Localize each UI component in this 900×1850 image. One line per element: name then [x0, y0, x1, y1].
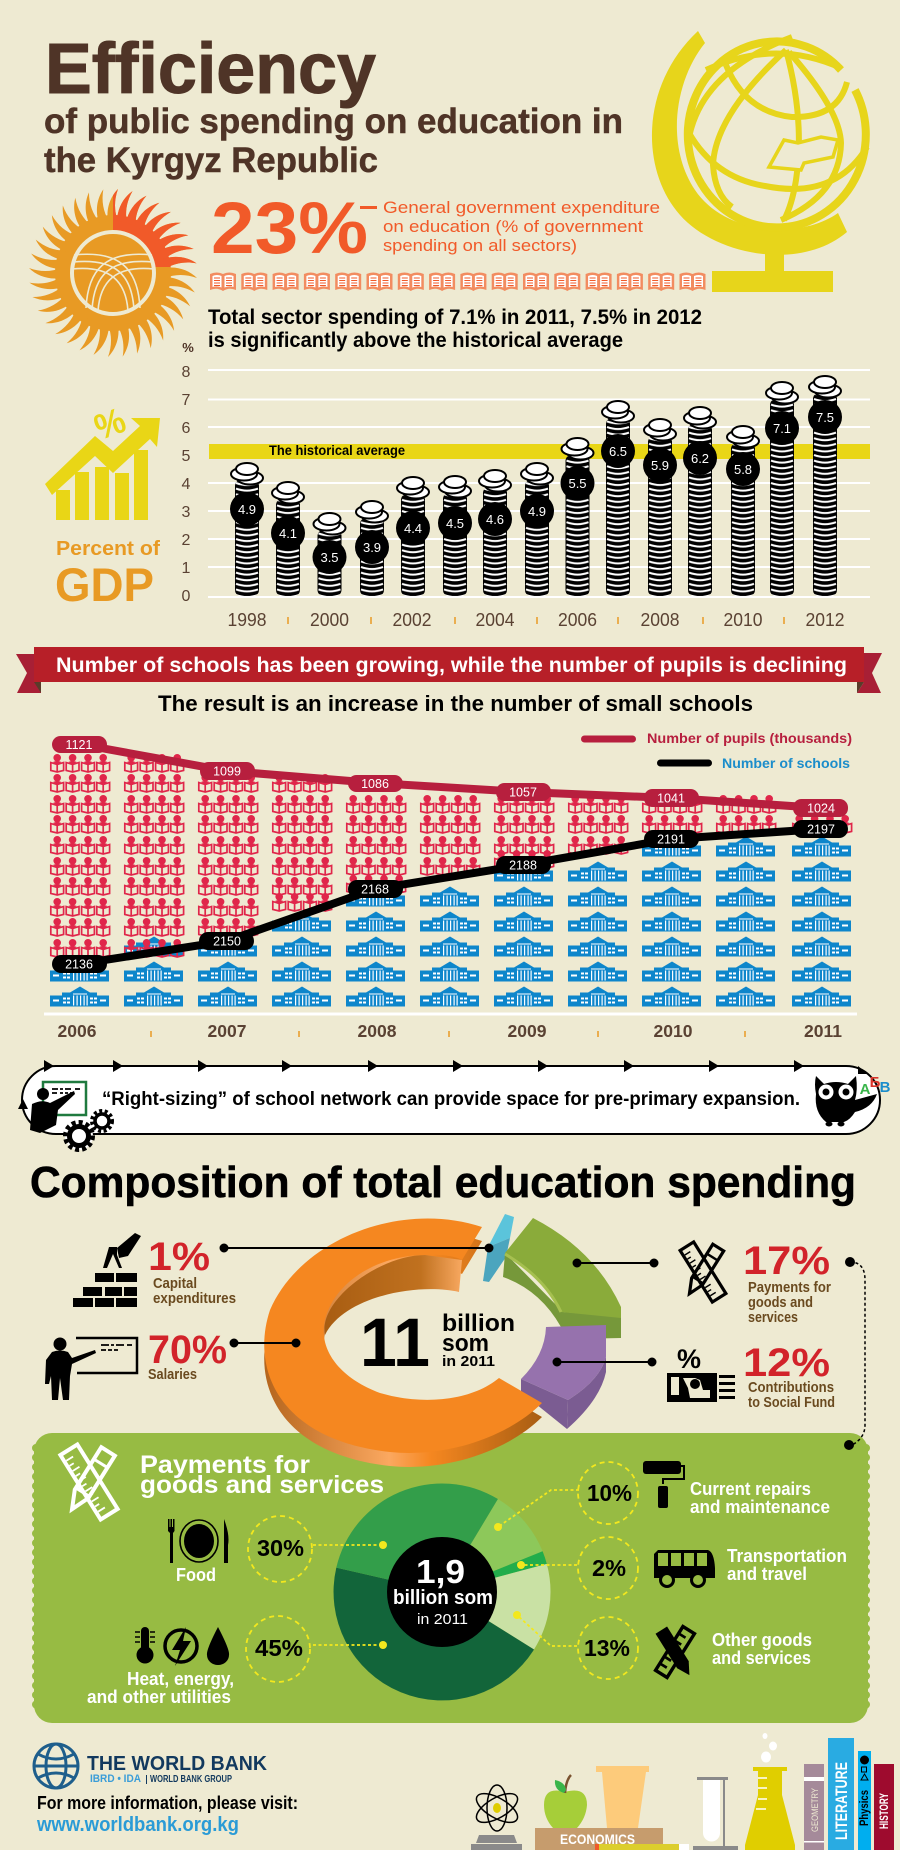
World Bank logo: WORLD BANK GROUP: [150, 1774, 232, 1785]
economics book: [535, 1828, 663, 1850]
icon: white ruler and pencil: [60, 1444, 118, 1520]
icon: ruler and pencil: [680, 1242, 726, 1302]
category labels: Current repairs: [690, 1479, 811, 1499]
World Bank logo: THE WORLD BANK: [87, 1753, 268, 1775]
icon: percent and banknotes: %: [677, 1344, 701, 1374]
book: history: HISTORY: [879, 1793, 891, 1829]
line chart: pupils and schools: 1041: [657, 792, 685, 806]
icon: owl with letters: [815, 1074, 891, 1126]
cup: [596, 1766, 649, 1828]
panel: payments for goods and services: [34, 1433, 868, 1723]
bar chart: spending as percent of GDP: 4.4: [404, 521, 422, 536]
item: capital expenditures: [73, 1233, 236, 1307]
donut chart: composition of spending: [264, 1214, 621, 1467]
callout values: 2%: [592, 1555, 626, 1581]
icon: paint roller: [643, 1461, 684, 1508]
callout values: 10%: [587, 1480, 632, 1506]
line chart: pupils and schools: 1057: [509, 786, 537, 800]
year axis: 2008: [358, 1021, 397, 1041]
callout: right-sizing: “Right-sizing” of school network can provide space for pre-primary expansion.: [102, 1089, 800, 1110]
book: literature: [828, 1738, 854, 1850]
bar chart: spending as percent of GDP: 2: [182, 532, 191, 549]
slice: salaries: [264, 1219, 542, 1467]
pencil: [595, 1844, 689, 1850]
test tube: [693, 1777, 738, 1850]
stat: 23 percent: 23%: [211, 188, 368, 269]
bar chart: spending as percent of GDP: 4.9: [238, 502, 256, 517]
stat: 23 percent: [211, 188, 660, 269]
bar chart: spending as percent of GDP: The historical average: [269, 443, 405, 458]
icon: bricks and trowel: [73, 1233, 141, 1307]
year axis: 2006: [58, 1021, 97, 1041]
slice: payments for goods and services: [503, 1218, 621, 1339]
line chart: pupils and schools: 2150: [213, 934, 241, 948]
callout dots: [379, 1523, 525, 1649]
item: capital expenditures: Capital: [153, 1275, 197, 1292]
chart heading: Total sector spending of 7.1% in 2011, 7.5% in 2012: [208, 306, 702, 329]
callout values: [255, 1480, 632, 1661]
bar chart: spending as percent of GDP: [182, 340, 870, 630]
bar chart: spending as percent of GDP: 4.1: [279, 526, 297, 541]
icon: globe on stand: [652, 31, 867, 292]
book: physics: Physics: [859, 1790, 871, 1826]
line chart: pupils and schools: 1121: [66, 738, 92, 752]
icon: bus: [654, 1550, 715, 1586]
legend: [581, 730, 852, 771]
category labels: Transportation: [727, 1546, 847, 1566]
icon: rising chart with percent: [45, 399, 160, 520]
title: [44, 30, 623, 180]
bar chart: spending as percent of GDP: 2012: [806, 610, 844, 630]
year axis: 2007: [208, 1021, 246, 1041]
bar chart: spending as percent of GDP: 7.1: [773, 421, 791, 436]
heading: composition: Composition of total education spending: [30, 1158, 856, 1207]
line chart: pupils and schools: 1099: [213, 764, 241, 778]
bar chart: spending as percent of GDP: 4.5: [446, 516, 464, 531]
item: capital expenditures: 1%: [148, 1235, 210, 1279]
bar chart: spending as percent of GDP: 7.5: [816, 410, 834, 425]
item: contributions to social fund: [667, 1341, 835, 1411]
bar chart: spending as percent of GDP: 4: [182, 476, 191, 493]
bar chart: spending as percent of GDP: 8: [182, 364, 191, 381]
bar chart: spending as percent of GDP: 7: [182, 392, 191, 409]
category labels: Heat, energy,: [127, 1669, 234, 1689]
bar chart: spending as percent of GDP: 6: [182, 420, 191, 437]
label: percent of GDP: Percent of: [56, 538, 160, 560]
stat: 23 percent: on education (% of government: [383, 217, 643, 236]
more information: www.worldbank.org.kg: [36, 1814, 239, 1836]
chart heading: is significantly above the historical average: [208, 329, 623, 352]
dashed callouts: [246, 1462, 638, 1682]
donut center total: 11: [360, 1304, 430, 1381]
item: capital expenditures: expenditures: [153, 1290, 236, 1307]
item: payments for goods and services: services: [748, 1309, 798, 1326]
item: salaries: 70%: [148, 1328, 227, 1372]
item: contributions to social fund: to Social Fund: [748, 1394, 835, 1411]
bar chart: spending as percent of GDP: 2002: [392, 610, 432, 630]
legend: Number of pupils (thousands): [647, 730, 852, 746]
bar chart: spending as percent of GDP: 0: [182, 588, 191, 605]
category labels: [87, 1479, 847, 1707]
bar chart: spending as percent of GDP: 6.5: [609, 444, 627, 459]
icon: owl with letters: А: [860, 1081, 871, 1098]
bar chart: spending as percent of GDP: 2004: [476, 610, 514, 630]
pie chart: in 2011: [417, 1611, 468, 1628]
flask: [745, 1733, 795, 1850]
item: payments for goods and services: 17%: [743, 1239, 830, 1283]
illustration: school shelf: [471, 1733, 894, 1850]
line chart: pupils and schools: [52, 736, 848, 973]
title: Efficiency: [45, 30, 376, 109]
pictogram: schools: [50, 836, 851, 1006]
atom on stand: [471, 1785, 522, 1850]
line chart: pupils and schools: 2136: [65, 958, 93, 972]
bar chart: spending as percent of GDP: 2010: [724, 610, 762, 630]
year axis: 2011: [804, 1021, 842, 1041]
pie chart: [334, 1484, 550, 1700]
book: literature: LITERATURE: [832, 1762, 851, 1840]
icon: teacher at board: [45, 1338, 137, 1400]
item: contributions to social fund: 12%: [743, 1341, 830, 1385]
bar chart: spending as percent of GDP: 5.8: [734, 462, 752, 477]
callout values: 45%: [255, 1635, 303, 1661]
line chart: pupils and schools: 1024: [807, 802, 835, 816]
callout values: 13%: [584, 1635, 630, 1661]
bar chart: spending as percent of GDP: 3: [182, 504, 191, 521]
more information: For more information, please visit:: [37, 1793, 298, 1813]
year axis: 2010: [654, 1021, 693, 1041]
slice: capital expenditures: [483, 1214, 514, 1282]
book: geometry: [804, 1764, 824, 1850]
pie chart: billion som: [393, 1587, 493, 1609]
title: of public spending on education in: [44, 102, 623, 141]
connectors: [220, 1244, 658, 1366]
bar chart: spending as percent of GDP: 3.9: [363, 540, 381, 555]
donut center total: som: [442, 1330, 489, 1357]
stat: 23 percent: spending on all sectors): [383, 236, 577, 255]
icon: black ruler and pencil: [656, 1626, 695, 1679]
category labels: and travel: [727, 1564, 807, 1584]
donut center total: billion: [442, 1310, 515, 1337]
title: the Kyrgyz Republic: [44, 141, 378, 180]
icon: owl with letters: В: [880, 1079, 891, 1096]
more information: [36, 1793, 298, 1836]
line chart: pupils and schools: 1086: [361, 777, 389, 791]
bar chart: spending as percent of GDP: 6.2: [691, 451, 709, 466]
line chart: pupils and schools: 2191: [657, 832, 685, 846]
item: payments for goods and services: Payments for: [748, 1279, 831, 1296]
item: contributions to social fund: Contributions: [748, 1379, 834, 1396]
bar chart: spending as percent of GDP: 5: [182, 448, 191, 465]
callout values: 30%: [257, 1535, 304, 1561]
bar chart: spending as percent of GDP: 3.5: [320, 550, 339, 565]
icon: teacher with gears: [30, 1082, 112, 1150]
bar chart: spending as percent of GDP: 2008: [640, 610, 680, 630]
donut center total: in 2011: [442, 1353, 495, 1370]
dashed connector to panel: [844, 1257, 865, 1450]
icon: thermometer bolt drop: [135, 1627, 229, 1666]
callout: right-sizing: [18, 1060, 891, 1150]
bar chart: spending as percent of GDP: 5.9: [651, 458, 669, 473]
bar chart: spending as percent of GDP: 4.6: [486, 512, 504, 527]
category labels: Food: [176, 1565, 216, 1585]
icon: owl with letters: Б: [870, 1074, 881, 1091]
panel heading: Payments for: [140, 1451, 310, 1479]
icon: fork plate knife: [168, 1519, 228, 1563]
item: salaries: Salaries: [148, 1366, 197, 1383]
label: percent of GDP: GDP: [55, 558, 154, 611]
bar chart: spending as percent of GDP: 2006: [558, 610, 597, 630]
subheading: The result is an increase in the number of small schools: [158, 691, 753, 716]
bar chart: spending as percent of GDP: 1998: [228, 610, 266, 630]
bar chart: spending as percent of GDP: 5.5: [568, 476, 587, 491]
chart heading: [208, 306, 702, 352]
World Bank logo: [34, 1744, 268, 1788]
book: history: [874, 1764, 894, 1850]
category labels: and other utilities: [87, 1687, 231, 1707]
bar chart: spending as percent of GDP: %: [182, 340, 194, 355]
category labels: Other goods: [712, 1630, 812, 1650]
panel heading: goods and services: [140, 1471, 384, 1499]
item: payments for goods and services: goods and: [748, 1294, 813, 1311]
line chart: pupils and schools: 2168: [361, 882, 389, 896]
icon: percent and banknotes: [667, 1344, 735, 1402]
item: salaries: [45, 1328, 227, 1400]
pie chart: 1,9: [416, 1553, 465, 1590]
apple: [544, 1775, 587, 1828]
icon: rising chart with percent: %: [89, 399, 131, 448]
slice: contributions to social fund: [521, 1325, 606, 1429]
pictogram: pupils: [51, 754, 852, 957]
bar chart: spending as percent of GDP: 2000: [310, 610, 349, 630]
line chart: pupils and schools: 2188: [509, 858, 537, 872]
bar chart: spending as percent of GDP: 1: [182, 560, 191, 577]
book: geometry: GEOMETRY: [810, 1788, 820, 1832]
stat: 23 percent: General government expenditure: [383, 198, 660, 217]
economics book: ECONOMICS: [560, 1831, 635, 1847]
year axis: [44, 1012, 857, 1041]
banner: schools and pupils: [16, 647, 882, 693]
category labels: and services: [712, 1648, 811, 1668]
donut center total: [360, 1304, 515, 1381]
category labels: and maintenance: [690, 1497, 830, 1517]
books row: [210, 272, 706, 291]
item: payments for goods and services: [680, 1239, 831, 1326]
book: physics: [858, 1751, 871, 1850]
icon: sun with tunduk: [29, 189, 197, 357]
banner: schools and pupils: Number of schools has been growing, while the number of pupils is declining: [56, 654, 847, 677]
legend: Number of schools: [722, 755, 850, 771]
panel heading: [140, 1451, 384, 1499]
line chart: pupils and schools: 2197: [807, 822, 835, 836]
bar chart: spending as percent of GDP: 4.9: [528, 504, 546, 519]
year axis: 2009: [508, 1021, 547, 1041]
World Bank logo: IBRD • IDA: [90, 1773, 141, 1785]
